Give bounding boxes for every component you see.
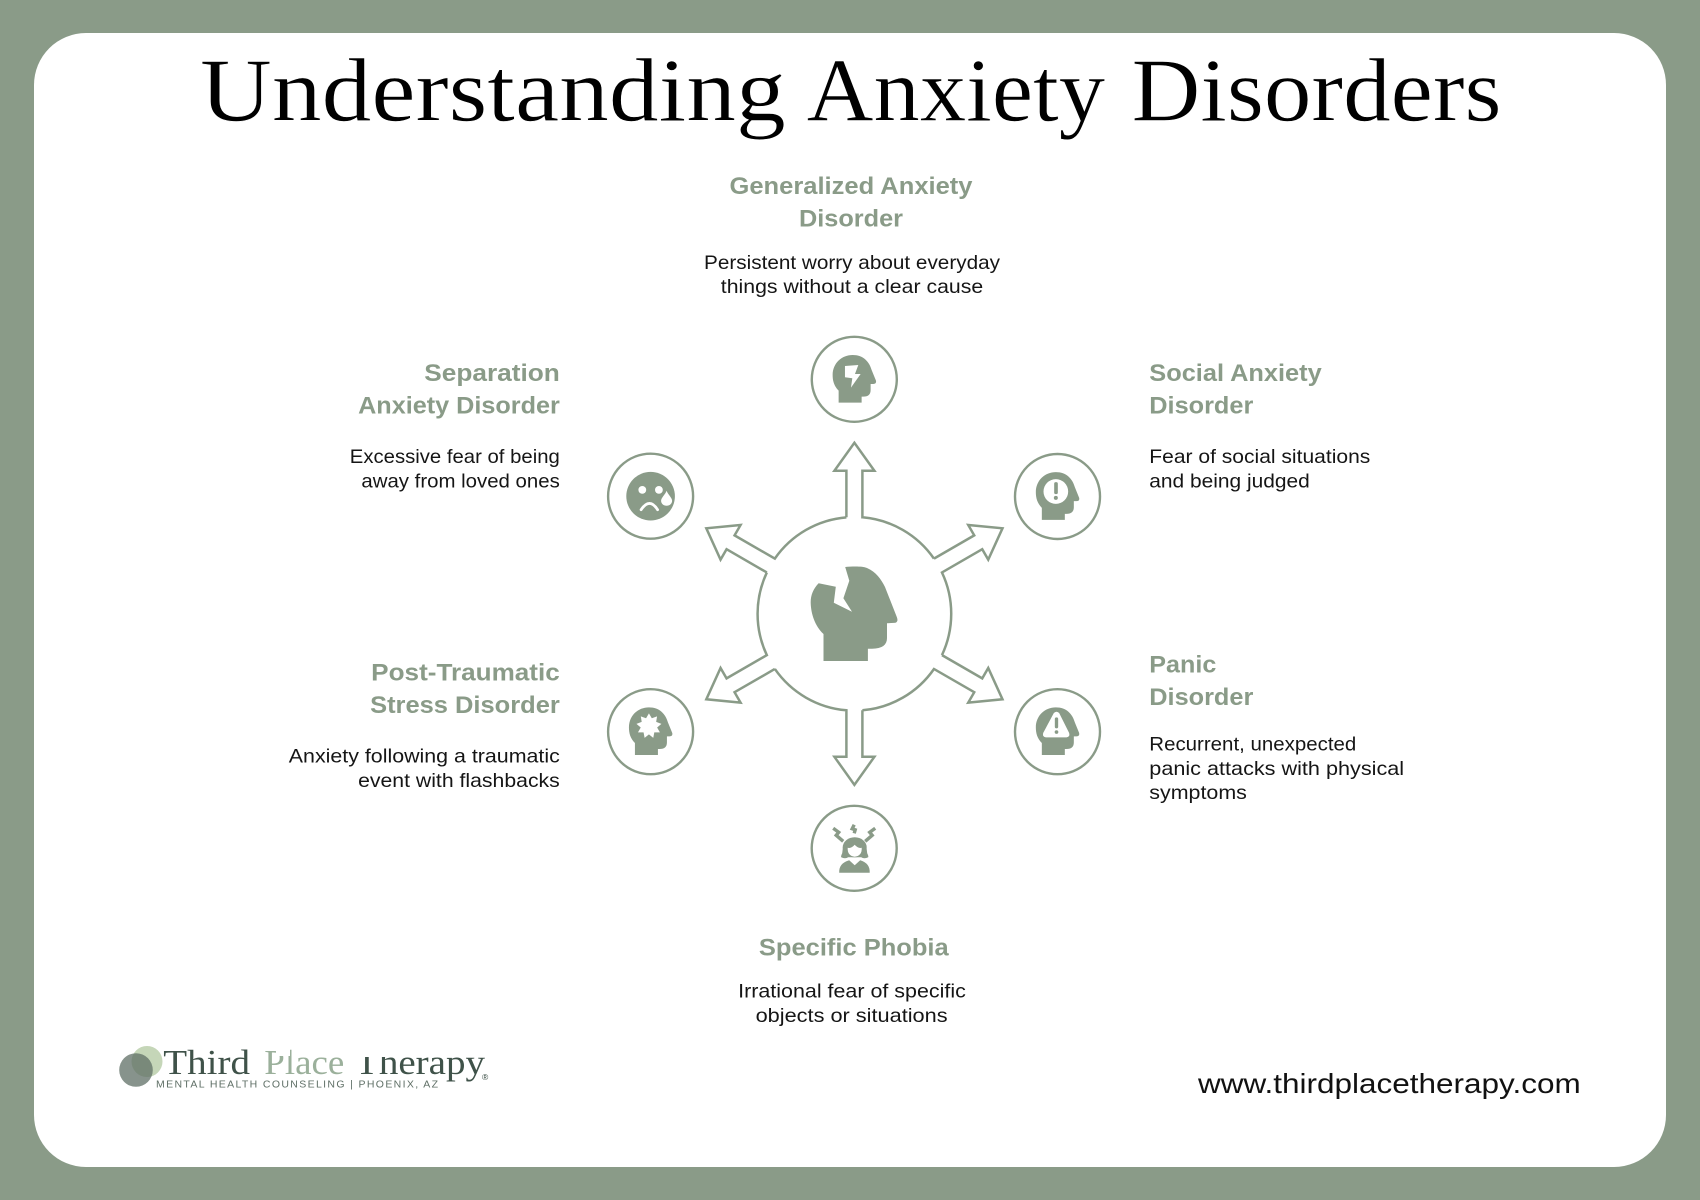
title: Disorders	[1132, 40, 1502, 140]
text block: post-traumatic stress disorder: Stress Disorder	[370, 692, 560, 719]
icon: specific phobia, stressed person	[812, 806, 897, 891]
text block: separation anxiety disorder: Separation	[424, 360, 560, 387]
text block: post-traumatic stress disorder: event with flashbacks	[358, 770, 560, 792]
logo: Third Place Therapy: ®	[482, 1072, 489, 1082]
text block: panic disorder: Panic	[1149, 652, 1216, 679]
title: Anxiety	[807, 40, 1105, 140]
icon: generalized anxiety, head with lightning	[812, 337, 897, 422]
text block: social anxiety disorder	[1149, 360, 1371, 492]
text block: post-traumatic stress disorder: Post-Traumatic	[371, 660, 560, 686]
text block: specific phobia: objects or situations	[756, 1005, 948, 1027]
text block: social anxiety disorder: and being judged	[1149, 470, 1310, 492]
text block: post-traumatic stress disorder: Anxiety following a traumatic	[289, 746, 560, 768]
icon: separation anxiety, crying face	[608, 454, 693, 539]
text block: generalized anxiety disorder: Persistent worry about everyday	[704, 252, 1000, 274]
logo: Third Place Therapy: Third	[163, 1043, 251, 1082]
title	[200, 40, 1502, 140]
text block: panic disorder: Disorder	[1149, 684, 1254, 711]
text block: panic disorder: panic attacks with physical	[1149, 758, 1404, 780]
logo: Third Place Therapy	[119, 1042, 489, 1091]
logo: Third Place Therapy: Therapy	[355, 1043, 486, 1082]
text block: separation anxiety disorder: away from loved ones	[361, 470, 560, 492]
text block: separation anxiety disorder: Anxiety Disorder	[358, 392, 560, 420]
text block: panic disorder: symptoms	[1149, 782, 1247, 804]
text block: social anxiety disorder: Fear of social situations	[1149, 446, 1371, 468]
text block: post-traumatic stress disorder	[289, 660, 560, 792]
text block: social anxiety disorder: Social Anxiety	[1149, 360, 1322, 387]
logo: Third Place Therapy: Place	[264, 1043, 344, 1082]
text block: panic disorder: Recurrent, unexpected	[1149, 734, 1356, 756]
title: Understanding	[200, 40, 786, 140]
text block: generalized anxiety disorder: Disorder	[799, 206, 903, 232]
text block: separation anxiety disorder: Excessive fear of being	[350, 446, 560, 468]
text block: specific phobia: Irrational fear of specific	[738, 980, 966, 1002]
text block: panic disorder	[1149, 652, 1404, 804]
text block: generalized anxiety disorder: Generalized Anxiety	[730, 173, 973, 200]
text block: generalized anxiety disorder	[704, 173, 1000, 298]
icon: central cracked head	[811, 567, 897, 661]
text block: specific phobia	[738, 934, 966, 1027]
text block: social anxiety disorder: Disorder	[1149, 392, 1254, 420]
icon: social anxiety, head with exclamation	[1015, 454, 1100, 539]
website url: www.thirdplacetherapy.com	[1197, 1068, 1581, 1099]
icon: post-traumatic stress, head with burst	[608, 689, 693, 774]
logo: Third Place Therapy: MENTAL HEALTH COUNSELING | PHOENIX, AZ	[156, 1079, 439, 1091]
icon: panic disorder, head with warning triangle	[1015, 689, 1100, 774]
central hub with six outward arrows	[667, 443, 1042, 785]
text block: generalized anxiety disorder: things without a clear cause	[721, 276, 983, 298]
text block: specific phobia: Specific Phobia	[759, 934, 949, 962]
text block: separation anxiety disorder	[350, 360, 560, 492]
